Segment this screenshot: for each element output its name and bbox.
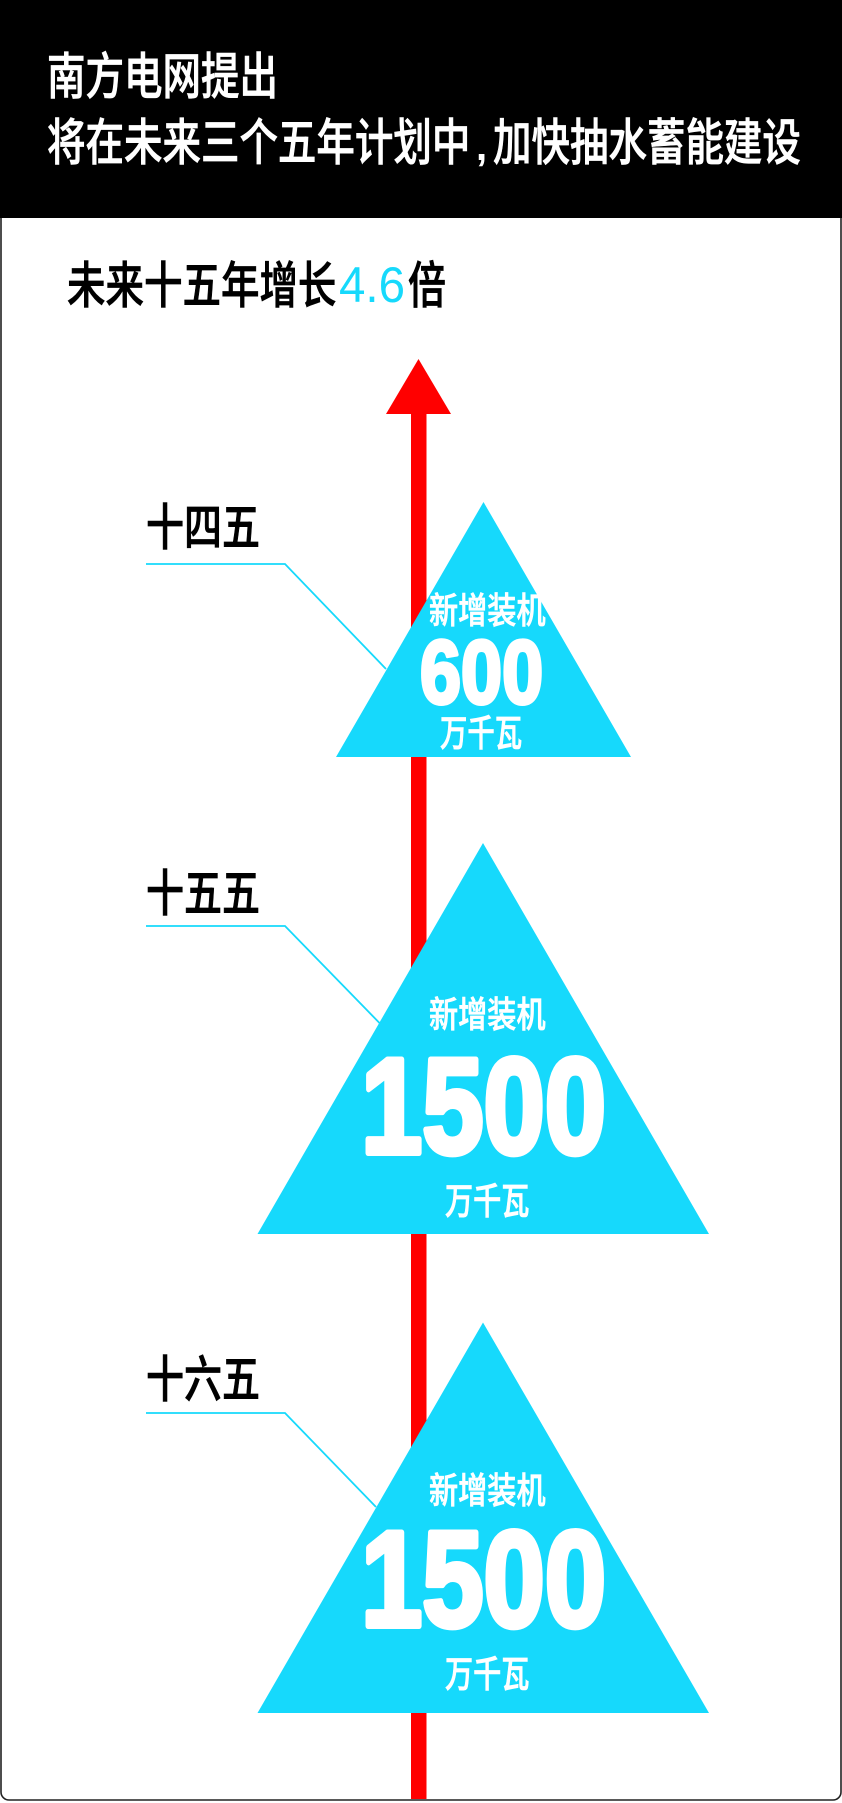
red growth arrow [386, 359, 451, 1799]
unit: 万千瓦 [445, 1180, 529, 1222]
leader line [146, 926, 380, 1023]
unit: 万千瓦 [445, 1653, 529, 1695]
leader line [146, 564, 386, 669]
subheading [67, 258, 446, 314]
header title line 2 [47, 116, 801, 171]
header title line 2: , [476, 125, 487, 169]
leader line [146, 1413, 376, 1507]
caption: 新增装机 [429, 994, 546, 1035]
stage label: 十四五 [146, 501, 260, 556]
stage: 十六五 [146, 1322, 709, 1713]
header title line 2: 将在未来三个五年计划中 [47, 116, 470, 171]
unit: 万千瓦 [440, 713, 522, 754]
header title line 2: 加快抽水蓄能建设 [493, 116, 801, 171]
value: 1500 [361, 1031, 606, 1183]
value: 600 [420, 623, 543, 723]
triangle [258, 843, 709, 1234]
subheading suffix: 倍 [408, 259, 446, 314]
caption: 新增装机 [429, 590, 546, 631]
subheading text: 未来十五年增长 [67, 259, 336, 314]
caption: 新增装机 [429, 1470, 546, 1511]
header title line 1: 南方电网提出 [47, 50, 278, 105]
value: 1500 [361, 1504, 606, 1656]
triangle [258, 1322, 709, 1713]
highlight multiplier: 4.6 [339, 258, 405, 313]
header band [0, 0, 842, 218]
stage label: 十六五 [146, 1353, 260, 1408]
triangle [336, 502, 631, 757]
stage: 十五五 [146, 843, 709, 1234]
stage: 十四五 [146, 501, 631, 757]
stage label: 十五五 [146, 867, 260, 922]
